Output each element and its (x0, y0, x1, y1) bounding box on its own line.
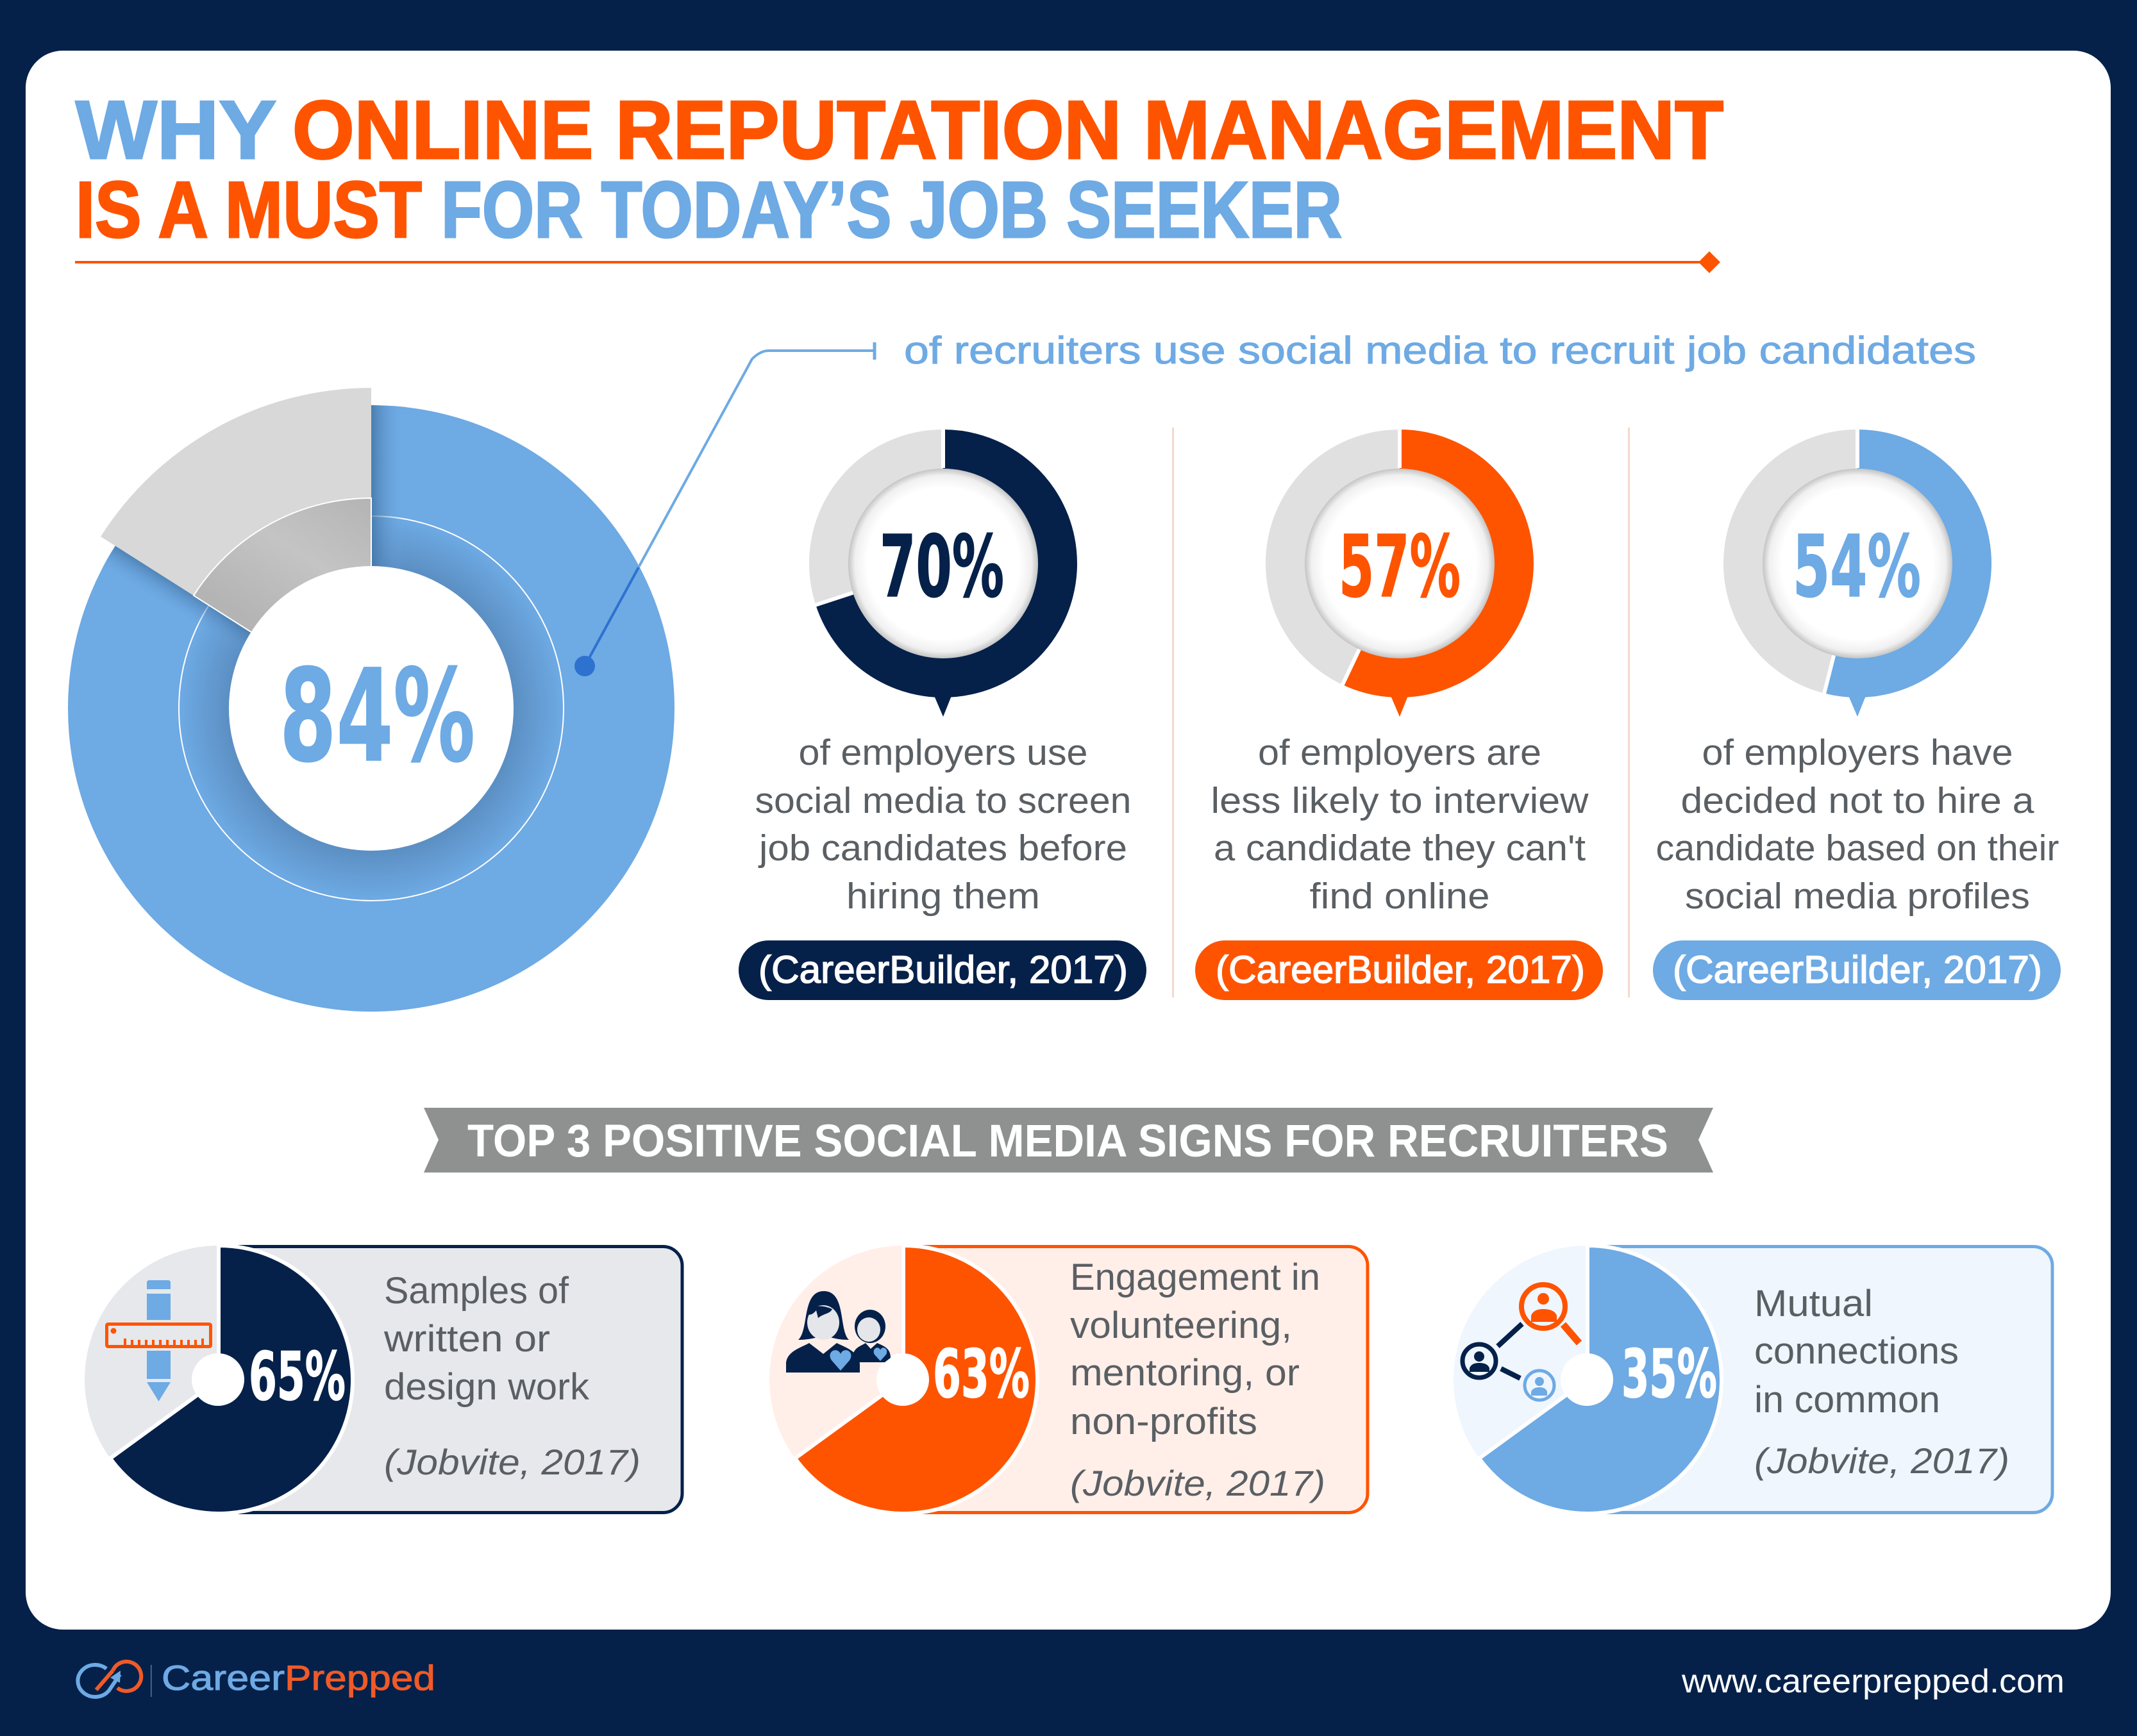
logo mark (78, 1662, 141, 1697)
top edge shadow (371, 405, 404, 567)
grey 16% wedge (101, 388, 371, 708)
centre hole (229, 566, 514, 851)
inner shaded ring (179, 516, 564, 901)
value 65%: 65% (249, 1339, 346, 1415)
title rule with diamond (75, 251, 1720, 273)
icon: two people with hearts (786, 1291, 891, 1373)
footer logo: CareerPrepped (78, 1658, 435, 1698)
pie slice 35% (1479, 1246, 1722, 1514)
panel: mutual connections (1454, 1246, 2052, 1514)
donut: 54%: 54% (1793, 518, 1921, 617)
column dividers (1172, 428, 1630, 997)
panel text: (Jobvite, 2017) (1070, 1463, 1325, 1503)
panel text: Engagement in (1070, 1256, 1320, 1298)
panel text: (Jobvite, 2017) (1754, 1440, 2009, 1481)
panel text (1754, 1283, 2009, 1481)
donut: 57%: 57% (1339, 518, 1461, 617)
wordmark: Career (162, 1658, 285, 1698)
text: 57% description: less likely to interview (1211, 780, 1589, 821)
panel text: non-profits (1070, 1401, 1257, 1442)
source pill: 70% (739, 940, 1146, 1000)
text: 57% description: of employers are (1258, 732, 1541, 773)
source pill: 54% (1653, 940, 2061, 1000)
text: 54% description: of employers have (1702, 732, 2013, 773)
panel text: written or (383, 1318, 550, 1360)
donut: 57% (1286, 427, 1514, 717)
source pill: 70%: (CareerBuilder, 2017) (758, 948, 1128, 991)
source pill: 57%: (CareerBuilder, 2017) (1216, 948, 1585, 991)
title: IS A MUST (76, 166, 422, 255)
source pill: 57% (1195, 940, 1603, 1000)
title (76, 84, 1723, 255)
panel text: Mutual (1754, 1283, 1873, 1324)
text: 54% description: social media profiles (1685, 876, 2030, 917)
chart: 84% donut (68, 388, 675, 1012)
text: 57% description (1211, 732, 1589, 917)
panel text: mentoring, or (1070, 1352, 1300, 1394)
wedge edge shadow (102, 546, 251, 654)
panel text: (Jobvite, 2017) (384, 1442, 641, 1482)
donut: 70%: 70% (880, 518, 1004, 617)
icon: pencil and ruler (106, 1280, 210, 1401)
panel text: Samples of (384, 1270, 569, 1312)
text: 54% description: decided not to hire a (1681, 780, 2034, 821)
panel text: design work (384, 1366, 590, 1408)
donut: 54% (1743, 427, 1972, 717)
panel: volunteering (769, 1246, 1368, 1514)
section banner: TOP 3 POSITIVE SOCIAL MEDIA SIGNS FOR RECRUITERS (467, 1116, 1668, 1167)
icon: connected people network (1462, 1285, 1579, 1400)
donut: 70% (813, 427, 1057, 717)
panel text: connections (1754, 1330, 1959, 1372)
text: 70% description: hiring them (846, 876, 1040, 917)
text: 54% description: candidate based on their (1655, 828, 2059, 869)
panel text: in common (1754, 1379, 1940, 1421)
title: FOR TODAY’S JOB SEEKER (441, 166, 1342, 255)
panel text (1070, 1256, 1325, 1503)
source pill: 54%: (CareerBuilder, 2017) (1673, 948, 2042, 991)
value: 84% (280, 642, 475, 790)
footer logo: CareerPrepped: Prepped (285, 1658, 435, 1698)
text: 70% description: social media to screen (755, 780, 1131, 821)
panel: samples of work (85, 1246, 682, 1514)
title: WHY (76, 84, 276, 176)
text: 70% description: job candidates before (758, 828, 1127, 869)
pie slice 65% (110, 1246, 353, 1514)
text: 57% description: find online (1309, 876, 1490, 917)
text: 54% description (1655, 732, 2059, 917)
panel text (383, 1270, 641, 1482)
title: ONLINE REPUTATION MANAGEMENT (292, 84, 1723, 176)
text: 70% description: of employers use (799, 732, 1087, 773)
grey inner wedge (194, 498, 371, 708)
panel text: volunteering, (1070, 1305, 1292, 1346)
text: 70% description (755, 732, 1131, 917)
text: 57% description: a candidate they can't (1214, 828, 1586, 869)
callout text: of recruiters use social media to recruit job candidates (904, 329, 1976, 372)
value 35%: 35% (1622, 1336, 1717, 1413)
footer website: www.careerprepped.com (1681, 1663, 2065, 1700)
value 63%: 63% (933, 1336, 1030, 1413)
pie slice 63% (795, 1246, 1037, 1514)
callout leader line (574, 342, 875, 676)
